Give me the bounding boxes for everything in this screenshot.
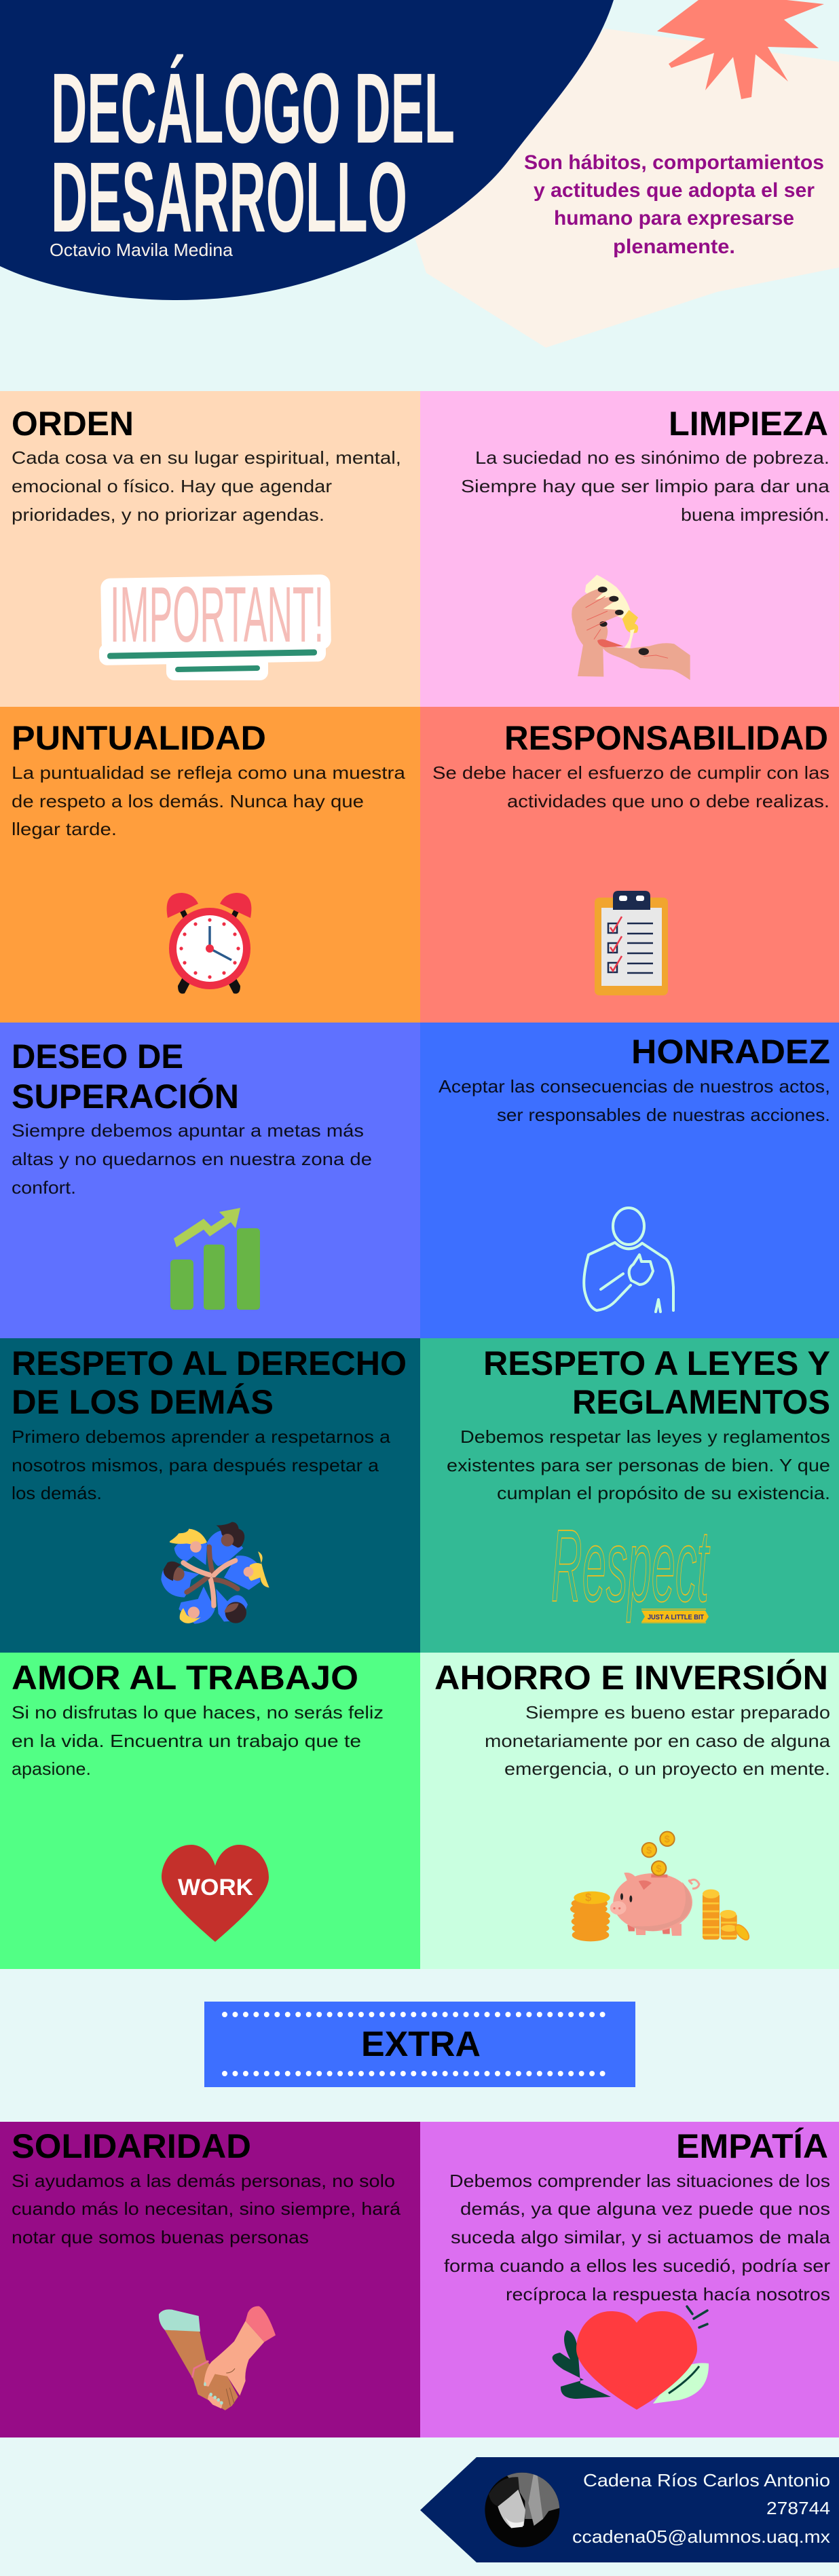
- panel: empatia: [420, 2122, 839, 2437]
- text: empatia: forma cuando a ellos les sucedió, podría ser: [444, 2256, 830, 2276]
- heading: honradez: HONRADEZ: [631, 1033, 830, 1071]
- icon: holding hands: [159, 2306, 276, 2410]
- dotted lines: [225, 2014, 613, 2074]
- text: empatia: recíproca la respuesta hacía nosotros: [506, 2284, 830, 2304]
- heading: empatia: EMPATÍA: [676, 2127, 828, 2165]
- navy shape: [0, 0, 614, 300]
- icon: piggy bank: $: [646, 1845, 652, 1856]
- author text: ccadena05@alumnos.uaq.mx: [572, 2526, 830, 2547]
- author text: [572, 2470, 830, 2547]
- text: honradez: Aceptar las consecuencias de nuestros actos,: [439, 1076, 830, 1097]
- heading: respeto a leyes: REGLAMENTOS: [572, 1383, 830, 1421]
- heading: respeto al derecho: RESPETO AL DERECHO: [12, 1344, 407, 1382]
- heading: responsabilidad: RESPONSABILIDAD: [504, 719, 828, 757]
- text: orden: emocional o físico. Hay que agendar: [12, 476, 332, 496]
- text: solidaridad: cuando más lo necesitan, sino siempre, hará: [12, 2198, 401, 2219]
- intro text: Son hábitos, comportamientos: [524, 151, 824, 174]
- panel: amor al trabajo: [0, 1653, 420, 1969]
- text: deseo de superacion: altas y no quedarnos en nuestra zona de: [12, 1149, 372, 1169]
- panel: deseo de superacion: [0, 1023, 420, 1338]
- text: solidaridad: Si ayudamos a las demás personas, no solo: [12, 2171, 395, 2191]
- text: ahorro e inversion: emergencia, o un proyecto en mente.: [504, 1759, 830, 1779]
- text: respeto al derecho: Primero debemos aprender a respetarnos a: [12, 1427, 391, 1447]
- heading: solidaridad: SOLIDARIDAD: [12, 2127, 251, 2165]
- icon: alarm clock: [167, 893, 251, 994]
- text: responsabilidad: [432, 762, 829, 811]
- intro text: humano para expresarse: [554, 207, 794, 229]
- panel: limpieza: [420, 391, 839, 707]
- intro text: [524, 151, 824, 258]
- heading: deseo de superacion: DESEO DE: [12, 1037, 183, 1075]
- heading: respeto a leyes: RESPETO A LEYES Y: [483, 1344, 830, 1382]
- panel: puntualidad: [0, 707, 420, 1023]
- text: puntualidad: La puntualidad se refleja como una muestra: [12, 762, 406, 783]
- text: solidaridad: notar que somos buenas personas: [12, 2227, 309, 2247]
- heading: deseo de superacion: [12, 1037, 239, 1116]
- text: respeto a leyes: [447, 1427, 830, 1503]
- heading: respeto al derecho: DE LOS DEMÁS: [12, 1383, 274, 1421]
- text: empatia: Debemos comprender las situaciones de los: [449, 2171, 830, 2191]
- text: limpieza: Siempre hay que ser limpio para dar una: [461, 476, 830, 496]
- icon: person hand on heart: [584, 1208, 673, 1312]
- heading: respeto a leyes: [483, 1344, 830, 1421]
- icon: hands with sanitizer: [572, 575, 690, 680]
- text: limpieza: [461, 447, 830, 525]
- icon: coral star: [657, 0, 824, 99]
- title: [51, 53, 455, 253]
- panel: respeto al derecho: [0, 1338, 420, 1653]
- text: empatia: demás, ya que alguna vez puede que nos: [460, 2198, 830, 2219]
- text: orden: [12, 447, 401, 525]
- text: ahorro e inversion: Siempre es bueno estar preparado: [525, 1702, 830, 1723]
- text: responsabilidad: Se debe hacer el esfuerzo de cumplir con las: [432, 762, 829, 783]
- icon: clipboard: [595, 891, 668, 995]
- title: DECÁLOGO DEL: [51, 53, 455, 164]
- text: limpieza: La suciedad no es sinónimo de pobreza.: [475, 447, 829, 468]
- heading: orden: ORDEN: [12, 405, 134, 443]
- panel: ahorro e inversion: [420, 1653, 839, 1969]
- icon: important sticker: [99, 570, 331, 680]
- text: puntualidad: de respeto a los demás. Nunca hay que: [12, 791, 364, 811]
- text: responsabilidad: actividades que uno o debe realizas.: [507, 791, 829, 811]
- text: limpieza: buena impresión.: [681, 504, 829, 525]
- footer tag: [420, 2457, 839, 2562]
- text: amor al trabajo: apasione.: [12, 1759, 91, 1779]
- panel: orden: [0, 391, 420, 707]
- text: orden: prioridades, y no priorizar agendas.: [12, 504, 324, 525]
- heading: respeto al derecho: [12, 1344, 407, 1421]
- icon: piggy bank: $: [665, 1835, 670, 1845]
- text: respeto al derecho: [12, 1427, 391, 1503]
- text: amor al trabajo: Si no disfrutas lo que haces, no serás feliz: [12, 1702, 384, 1723]
- title: DESARROLLO: [51, 142, 407, 253]
- text: puntualidad: [12, 762, 406, 839]
- panel: honradez: [420, 1023, 839, 1338]
- text: honradez: ser responsables de nuestras acciones.: [497, 1105, 830, 1125]
- text: puntualidad: llegar tarde.: [12, 819, 117, 839]
- icon: work heart: [162, 1845, 269, 1942]
- text: deseo de superacion: confort.: [12, 1177, 76, 1198]
- icon: piggy bank: $: [585, 1891, 592, 1904]
- icon: piggy bank: $: [656, 1864, 661, 1875]
- heading: ahorro e inversion: AHORRO E INVERSIÓN: [434, 1659, 828, 1697]
- author text: Cadena Ríos Carlos Antonio: [583, 2470, 830, 2490]
- icon: heart with leaves: [553, 2306, 709, 2410]
- text: amor al trabajo: [12, 1702, 384, 1779]
- text: ahorro e inversion: [485, 1702, 831, 1779]
- intro text: y actitudes que adopta el ser: [534, 179, 815, 202]
- heading: limpieza: LIMPIEZA: [669, 405, 828, 443]
- panel: extra banner: [204, 2002, 635, 2087]
- panel: responsabilidad: [420, 707, 839, 1023]
- text: respeto al derecho: los demás.: [12, 1483, 102, 1503]
- text: ahorro e inversion: monetariamente por en caso de alguna: [485, 1731, 831, 1751]
- intro text: plenamente.: [613, 236, 735, 258]
- text: honradez: [439, 1076, 830, 1125]
- avatar: [484, 2471, 561, 2548]
- text: deseo de superacion: [12, 1120, 372, 1198]
- text: empatia: [444, 2171, 831, 2304]
- icon: piggy bank: [570, 1832, 751, 1942]
- text: empatia: suceda algo similar, y si actuamos de mala: [451, 2227, 831, 2247]
- icon: growth chart: [170, 1208, 260, 1310]
- text: amor al trabajo: en la vida. Encuentra un trabajo que te: [12, 1731, 361, 1751]
- panel: respeto a leyes: [420, 1338, 839, 1653]
- text: respeto a leyes: Debemos respetar las leyes y reglamentos: [460, 1427, 830, 1447]
- text: orden: Cada cosa va en su lugar espiritual, mental,: [12, 447, 401, 468]
- icon: respect lettering: Respect: [551, 1509, 710, 1623]
- text: solidaridad: [12, 2171, 401, 2247]
- text: respeto al derecho: nosotros mismos, para después respetar a: [12, 1455, 379, 1475]
- panel: solidaridad: [0, 2122, 420, 2437]
- icon: respect lettering: JUST A LITTLE BIT: [648, 1614, 704, 1621]
- cream blob: [415, 29, 839, 348]
- heading: deseo de superacion: SUPERACIÓN: [12, 1078, 239, 1116]
- panel: orden: IMPORTANT!: [110, 570, 324, 659]
- heading: puntualidad: PUNTUALIDAD: [12, 719, 266, 757]
- header: [0, 0, 839, 348]
- icon: circle of people: [161, 1522, 269, 1624]
- icon: work heart: WORK: [178, 1875, 253, 1900]
- author text: 278744: [766, 2498, 830, 2518]
- text: respeto a leyes: cumplan el propósito de su existencia.: [497, 1483, 830, 1503]
- author: Octavio Mavila Medina: [50, 240, 234, 260]
- heading: extra: EXTRA: [361, 2025, 481, 2064]
- text: respeto a leyes: existentes para ser personas de bien. Y que: [447, 1455, 830, 1475]
- text: deseo de superacion: Siempre debemos apuntar a metas más: [12, 1120, 364, 1141]
- heading: amor al trabajo: AMOR AL TRABAJO: [12, 1659, 358, 1697]
